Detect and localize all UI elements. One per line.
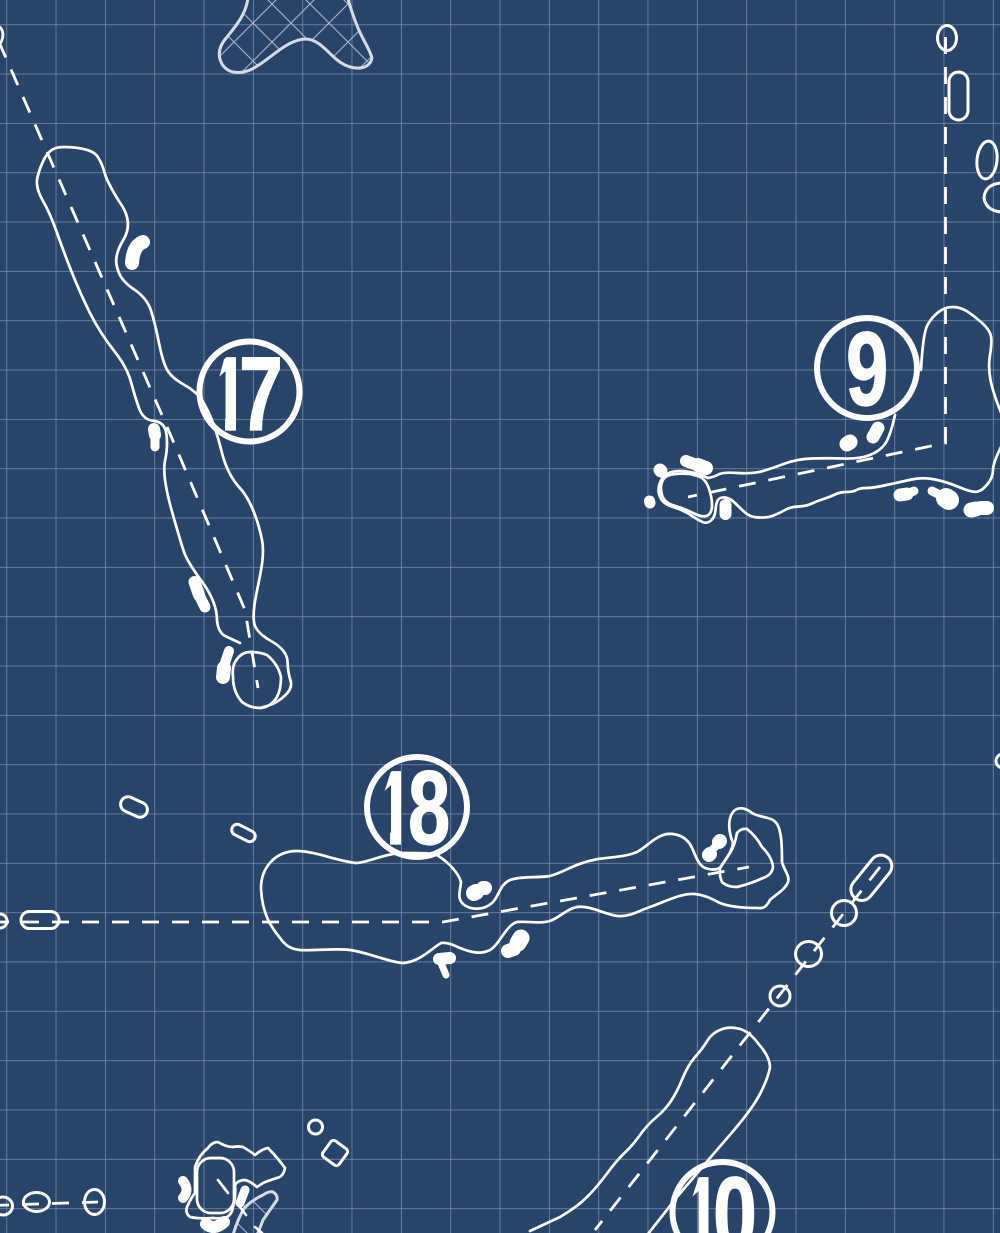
hole 9 number badge: 9 [846,311,888,428]
hole 18 tees [0,912,59,928]
hole 18 [0,750,788,975]
hole 9 tees [938,26,1000,212]
hole 9 green [661,474,712,516]
water hazard: top lake [219,0,372,72]
hole 10 [530,851,896,1233]
hole 17 centre line [0,42,258,688]
hole 9 centre line [688,37,946,497]
lower-left flag line [218,1180,262,1233]
hole 18 green [720,829,773,887]
lower-left bunkers [183,1181,245,1227]
lower-left tees [0,1190,104,1215]
hole 10 number badge [672,1155,772,1233]
hole 18 fairway outline [261,808,788,963]
hole 9 [650,26,1000,523]
hole 17 number badge [200,335,300,453]
hole 17 fairway outline [37,147,291,708]
hole 18 bunkers [439,841,720,975]
hole 10 centre line [595,867,880,1230]
hole 17 [0,27,300,708]
hole 17 number badge: 7 [239,335,283,453]
lower-left fairway outline [186,1142,285,1218]
hole 17 tee remnant [0,27,3,44]
hole 17 bunkers [132,242,229,677]
hole 17 green [233,652,281,708]
hole 18 number badge: 8 [408,750,450,867]
hole 9 number badge [817,311,917,428]
hole 18 number badge: 1 [374,750,416,867]
lower-left water hazard [233,1192,277,1233]
hole 9 fairway outline [708,415,895,478]
lower-left green [197,1158,234,1213]
hole 17 number badge: 1 [208,336,250,453]
hole 18 centre line [0,867,749,922]
lower-left centre line [0,1202,98,1206]
hole 9 bunkers [650,428,987,514]
lower-left hole [0,1142,285,1233]
hole 10 fairway outline [530,1028,770,1233]
hole 18 number badge [367,750,467,867]
hole 10 tees [770,851,896,1006]
small tee islands [118,754,1000,1167]
